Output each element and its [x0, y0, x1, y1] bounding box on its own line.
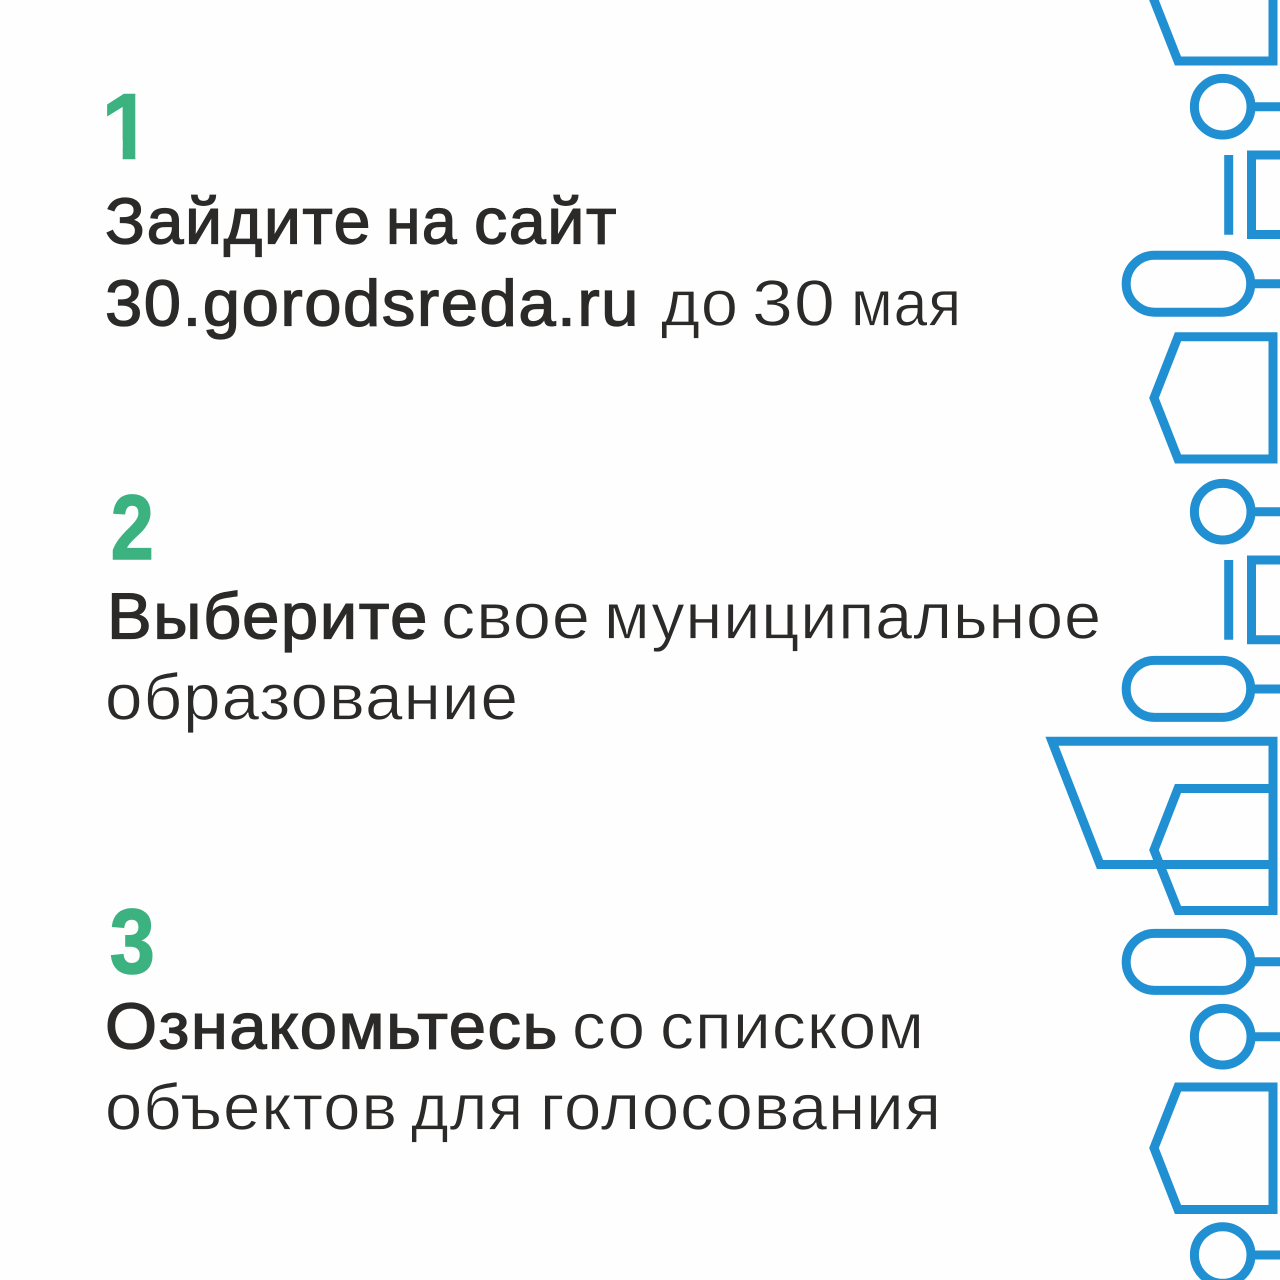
pentagon 2 — [1154, 788, 1273, 910]
step 3 number: 3 — [110, 891, 155, 993]
predefined process shape 1 — [1229, 155, 1280, 235]
step 1 deadline: мая — [851, 266, 962, 340]
trapezoid — [1052, 741, 1273, 864]
step 2 number: 2 — [111, 477, 154, 579]
step 1 website address: 30.gorodsreda.ru — [105, 266, 640, 340]
step 1 heading: first line — [105, 185, 618, 258]
step 1 heading: first line: сайт — [474, 185, 618, 258]
step 1 number: 1 — [102, 74, 154, 179]
circle connector 4 — [1194, 1227, 1280, 1280]
predefined process shape 2 — [1229, 560, 1280, 640]
step 1 deadline: до — [661, 266, 739, 340]
step 1 deadline — [661, 266, 962, 340]
pill terminator 2 — [1126, 660, 1280, 717]
step 1 heading: first line: Зайдите — [105, 185, 372, 258]
circle connector 1 — [1194, 78, 1280, 135]
step 1 — [102, 74, 962, 340]
step 3 text second line: голосования — [540, 1070, 942, 1144]
circle connector 3 — [1194, 1008, 1280, 1065]
step 2 text second line: образование — [105, 660, 519, 734]
step 3 text second line: для — [411, 1070, 524, 1144]
step 2 text first line: муниципальное — [604, 580, 1102, 653]
step 1 heading: first line: на — [386, 185, 458, 258]
step 1 deadline: 30 — [752, 266, 836, 340]
pill terminator 3 — [1126, 933, 1280, 990]
step 3 text second line: объектов — [105, 1070, 398, 1144]
decorative flowchart column — [1052, 0, 1280, 1280]
step 3 — [105, 891, 942, 1144]
circle connector 2 — [1194, 483, 1280, 540]
pill terminator 1 — [1126, 255, 1280, 312]
step 3 text first line: списком — [660, 989, 925, 1062]
top cut-off pentagon — [1152, 0, 1273, 61]
step 2 — [105, 477, 1102, 734]
step 3 text first line: со — [572, 989, 646, 1062]
step 2 text first line: свое — [441, 580, 591, 653]
step 3 text second line — [105, 1070, 942, 1144]
step 3 bold verb: Ознакомьтесь — [105, 989, 559, 1062]
pentagon 3 — [1154, 1087, 1273, 1210]
pentagon 1 — [1154, 337, 1273, 459]
step 2 bold verb: Выберите — [107, 580, 429, 653]
